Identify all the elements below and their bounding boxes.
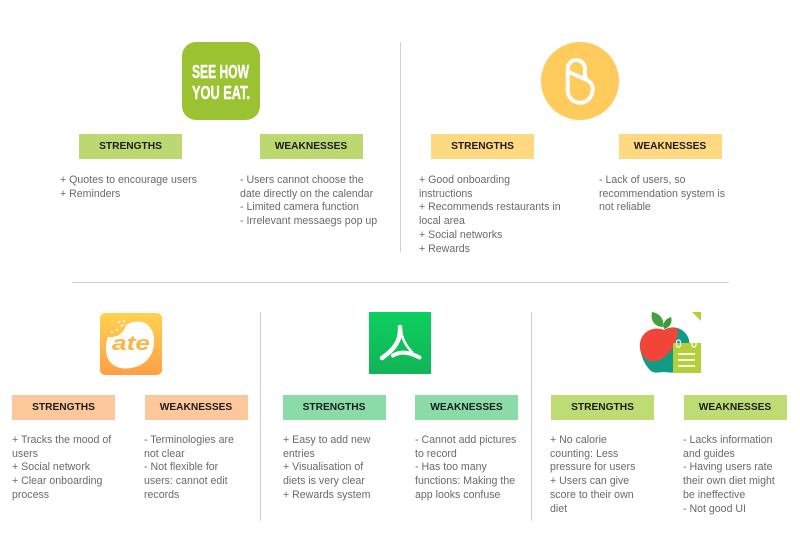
text: strengths list: + Good onboarding [419,174,510,186]
panel: B app [419,42,725,255]
text: weaknesses list: app looks confuse [415,489,500,501]
heading: weaknesses: WEAKNESSES [160,402,232,412]
text: strengths list [419,174,561,255]
heading: strengths [431,134,534,159]
text: weaknesses list: recommendation system is [599,188,725,200]
text: weaknesses list: functions: Making the [415,475,515,487]
heading: strengths: STRENGTHS [451,141,514,152]
heading: weaknesses [144,394,248,420]
heading: weaknesses [260,134,362,159]
text: strengths list: + Social network [12,461,90,473]
icon: apple and notepad [640,312,701,373]
text: strengths list [283,434,370,501]
text: weaknesses list: users: cannot edit [144,475,228,487]
text: strengths list: diet [550,503,567,515]
text: strengths list [60,174,197,200]
heading: weaknesses [618,134,722,159]
text: strengths list: process [12,489,49,501]
text: weaknesses list: to record [415,448,457,460]
icon: triangle logo [369,312,431,374]
heading: strengths: STRENGTHS [571,402,634,412]
panel: See How You Eat [60,42,377,227]
panel: green triangle app [283,312,518,501]
text: weaknesses list: and guides [683,448,735,460]
text: weaknesses list: - Limited camera function [240,201,359,213]
text: weaknesses list: not clear [144,448,185,460]
text: strengths list [12,434,112,501]
heading: strengths: STRENGTHS [303,402,365,412]
text: strengths list: + Rewards system [283,489,370,501]
text: strengths list: + Reminders [60,188,120,200]
panel: apple diary app [550,312,787,515]
text: weaknesses list: - Users cannot choose the [240,174,364,186]
text: strengths list: + Rewards [419,243,470,255]
text: strengths list: + Visualisation of [283,461,363,473]
text: strengths list [550,434,635,515]
text: strengths list: + No calorie [550,434,607,446]
text: strengths list: + Recommends restaurants in [419,201,561,213]
text: weaknesses list: - Irrelevant messaegs pop up [240,215,377,227]
text: weaknesses list [240,174,377,227]
heading: strengths [551,394,654,420]
heading: strengths [282,394,386,420]
icon: Ate logo [100,313,162,375]
text: weaknesses list: - Terminologies are [144,434,234,446]
text: strengths list: + Users can give [550,475,629,487]
text: strengths list: users [12,448,38,460]
text: weaknesses list [144,434,234,501]
icon: See How You Eat logo [182,42,260,120]
text: weaknesses list: their own diet might [683,475,775,487]
heading: weaknesses: WEAKNESSES [275,141,347,152]
text: strengths list: + Social networks [419,229,502,241]
text: strengths list: diets is very clear [283,475,365,487]
text: strengths list: pressure for users [550,461,635,473]
text: weaknesses list: - Has too many [415,461,487,473]
text: strengths list: instructions [419,188,473,200]
heading: weaknesses: WEAKNESSES [634,141,706,152]
heading: strengths: STRENGTHS [32,402,95,412]
text: weaknesses list: - Not flexible for [144,461,218,473]
heading: strengths [79,134,182,159]
text: weaknesses list: records [144,489,179,501]
text: weaknesses list: - Cannot add pictures [415,434,516,446]
text: weaknesses list: - Having users rate [683,461,772,473]
text: strengths list: + Tracks the mood of [12,434,111,446]
icon: Ate logo: ate [112,332,150,354]
text: weaknesses list [683,434,775,515]
text: strengths list: + Clear onboarding [12,475,102,487]
text: weaknesses list: - Not good UI [683,503,746,515]
panel: Ate [12,313,248,501]
heading: strengths [12,394,115,420]
heading: strengths: STRENGTHS [99,141,162,152]
text: strengths list: entries [283,448,315,460]
text: weaknesses list: be ineffective [683,489,745,501]
heading: weaknesses [684,394,786,420]
heading: weaknesses: WEAKNESSES [699,402,771,412]
text: weaknesses list [599,174,725,213]
text: weaknesses list: not reliable [599,201,651,213]
text: weaknesses list [415,434,516,501]
text: weaknesses list: - Lack of users, so [599,174,686,186]
text: weaknesses list: date directly on the calendar [240,188,373,200]
heading: weaknesses [415,394,518,420]
heading: weaknesses: WEAKNESSES [430,402,503,412]
icon: B logo [541,42,619,120]
text: strengths list: counting: Less [550,448,618,460]
text: weaknesses list: - Lacks information [683,434,772,446]
text: strengths list: + Quotes to encourage users [60,174,197,186]
text: strengths list: local area [419,215,465,227]
text: strengths list: + Easy to add new [283,434,370,446]
text: strengths list: score to their own [550,489,634,501]
